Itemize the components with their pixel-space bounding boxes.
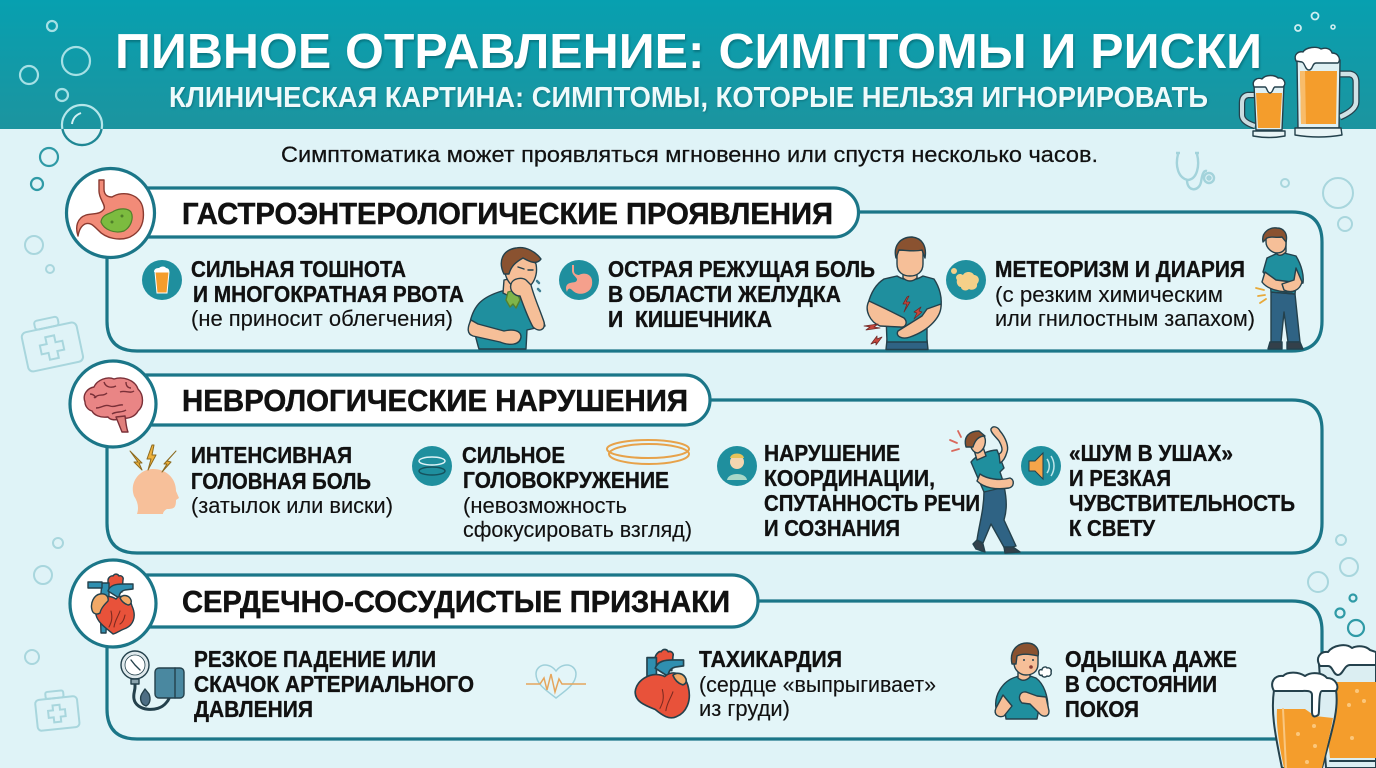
decorative bubbles left bbox=[20, 21, 102, 664]
item: stomach pain: ОСТРАЯ РЕЖУЩАЯ БОЛЬ bbox=[608, 256, 875, 282]
figure: man short of breath bbox=[995, 643, 1051, 719]
item: stomach pain: В ОБЛАСТИ ЖЕЛУДКА bbox=[608, 281, 841, 307]
item: dyspnea bbox=[1065, 646, 1237, 722]
item: dizziness bbox=[412, 440, 692, 542]
item: headache: ГОЛОВНАЯ БОЛЬ bbox=[191, 468, 371, 494]
item: dizziness: СИЛЬНОЕ bbox=[462, 442, 565, 468]
icon: gas cloud badge bbox=[946, 260, 986, 300]
icon circle: stomach bbox=[66, 168, 154, 258]
item: tinnitus bbox=[1021, 440, 1295, 541]
panel: neuro bbox=[70, 361, 1322, 553]
item: blood pressure: СКАЧОК АРТЕРИАЛЬНОГО bbox=[194, 671, 474, 697]
icon: sound badge bbox=[1021, 446, 1061, 486]
item: headache: ИНТЕНСИВНАЯ bbox=[191, 442, 352, 468]
panel: gastro bbox=[66, 168, 1322, 351]
item: flatulence bbox=[946, 256, 1255, 331]
intro line: Симптоматика может проявляться мгновенно или спустя несколько часов. bbox=[281, 142, 1098, 167]
item: flatulence: или гнилостным запахом) bbox=[995, 306, 1255, 331]
heading pill: neuro: НЕВРОЛОГИЧЕСКИЕ НАРУШЕНИЯ bbox=[182, 384, 688, 418]
icon: dizziness badge bbox=[412, 446, 452, 486]
title: ПИВНОЕ ОТРАВЛЕНИЕ: СИМПТОМЫ И РИСКИ bbox=[115, 25, 1262, 79]
item: coordination: НАРУШЕНИЕ bbox=[764, 440, 900, 466]
item: nausea: СИЛЬНАЯ ТОШНОТА bbox=[191, 256, 406, 282]
decorative bubbles right bbox=[1281, 178, 1364, 665]
item: dyspnea: В СОСТОЯНИИ bbox=[1065, 671, 1217, 697]
item: dyspnea: ОДЫШКА ДАЖЕ bbox=[1065, 646, 1237, 672]
item: nausea bbox=[142, 256, 464, 331]
item: headache: (затылок или виски) bbox=[191, 493, 393, 518]
item: tachycardia: из груди) bbox=[699, 696, 790, 721]
icon: beer badge bbox=[142, 260, 182, 300]
item: coordination: СПУТАННОСТЬ РЕЧИ bbox=[764, 490, 980, 516]
icon: beer mugs top right bbox=[1242, 12, 1356, 138]
figure: man with stomach pain bbox=[864, 237, 941, 350]
figure: man vomiting bbox=[468, 248, 545, 349]
icon: beer glasses bottom right bbox=[1272, 645, 1376, 768]
item: flatulence: (с резким химическим bbox=[995, 282, 1223, 307]
icon: tonometer bbox=[121, 651, 184, 709]
item: tinnitus: ЧУВСТВИТЕЛЬНОСТЬ bbox=[1069, 490, 1295, 516]
heading pill: gastro bbox=[110, 188, 858, 237]
heading pill: cardio bbox=[113, 575, 758, 627]
heading pill: gastro: ГАСТРОЭНТЕРОЛОГИЧЕСКИЕ ПРОЯВЛЕНИЯ bbox=[182, 197, 833, 231]
item: dyspnea: ПОКОЯ bbox=[1065, 696, 1139, 722]
item: dizziness: ГОЛОВОКРУЖЕНИЕ bbox=[463, 467, 669, 493]
item: tinnitus: К СВЕТУ bbox=[1069, 515, 1156, 541]
item: dizziness: сфокусировать взгляд) bbox=[463, 517, 692, 542]
icon: dizzy rings bbox=[607, 440, 689, 464]
figure: staggering man bbox=[950, 427, 1020, 553]
panel: cardio bbox=[70, 560, 1322, 739]
icon circle: brain bbox=[70, 361, 156, 447]
item: blood pressure: РЕЗКОЕ ПАДЕНИЕ ИЛИ bbox=[194, 646, 436, 672]
item: tachycardia: (сердце «выпрыгивает» bbox=[699, 672, 936, 697]
item: coordination: КООРДИНАЦИИ, bbox=[764, 465, 935, 491]
heading pill: cardio: СЕРДЕЧНО-СОСУДИСТЫЕ ПРИЗНАКИ bbox=[182, 585, 730, 619]
icon: confused head badge bbox=[717, 446, 757, 486]
item: coordination bbox=[717, 440, 980, 541]
item: tachycardia bbox=[635, 646, 936, 721]
icon: first aid kit upper left bbox=[19, 313, 84, 372]
item: tinnitus: «ШУМ В УШАХ» bbox=[1069, 440, 1233, 466]
item: nausea: (не приносит облегчения) bbox=[191, 306, 453, 331]
icon: stomach badge bbox=[559, 260, 599, 300]
item: stomach pain: И КИШЕЧНИКА bbox=[608, 306, 772, 332]
item: nausea: И МНОГОКРАТНАЯ РВОТА bbox=[193, 281, 464, 307]
icon: head with lightning bbox=[130, 445, 179, 514]
item: stomach pain bbox=[559, 256, 875, 332]
header band bbox=[0, 0, 1376, 129]
item: tinnitus: И РЕЗКАЯ bbox=[1069, 465, 1171, 491]
icon: anatomical heart large bbox=[635, 649, 689, 718]
icon: first aid kit lower left bbox=[34, 689, 80, 731]
icon: anatomical heart bbox=[88, 574, 134, 634]
heading pill: neuro bbox=[113, 375, 710, 425]
item: dizziness: (невозможность bbox=[463, 493, 627, 518]
icon: heart with pulse bbox=[526, 665, 586, 698]
item: blood pressure: ДАВЛЕНИЯ bbox=[194, 696, 313, 722]
item: headache bbox=[130, 442, 393, 518]
item: coordination: И СОЗНАНИЯ bbox=[764, 515, 900, 541]
item: flatulence: МЕТЕОРИЗМ И ДИАРИЯ bbox=[995, 256, 1245, 282]
item: blood pressure bbox=[121, 646, 474, 722]
subtitle: КЛИНИЧЕСКАЯ КАРТИНА: СИМПТОМЫ, КОТОРЫЕ НЕЛЬЗЯ ИГНОРИРОВАТЬ bbox=[169, 82, 1208, 114]
figure: man with diarrhea bbox=[1256, 228, 1303, 349]
icon: stethoscope bbox=[1176, 153, 1214, 189]
icon circle: heart bbox=[70, 560, 156, 647]
item: tachycardia: ТАХИКАРДИЯ bbox=[699, 646, 842, 672]
